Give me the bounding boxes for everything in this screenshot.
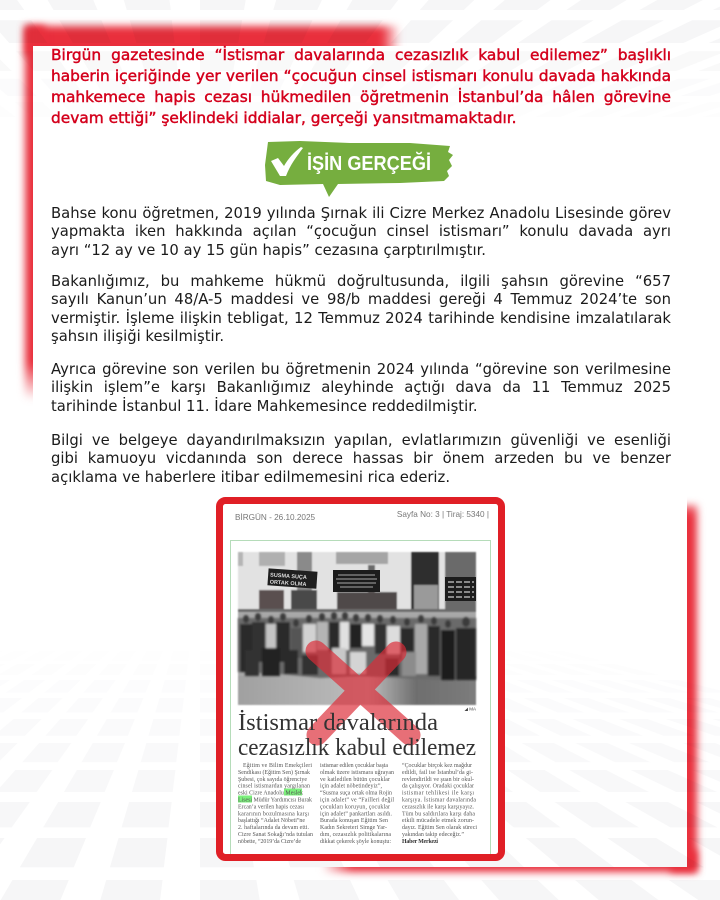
paragraph 2: Bakanlığımız, bu mahkeme hükmü doğrultusunda, ilgili şahsın görevine “657 (51, 273, 671, 290)
newspaper columns: başlattığı “Adalet Nöbeti”ne (238, 817, 305, 824)
paragraph 4: Bilgi ve belgeye dayandırılmaksızın yapılan, evlatlarımızın güvenliği ve esenliği (51, 432, 671, 449)
newspaper columns: Şubesi, çok sayıda öğrenciye (238, 776, 307, 783)
clipping page info: Sayfa No: 3 | Tiraj: 5340 | (397, 510, 489, 519)
newspaper columns: istismar edilen çocuklar başta (320, 763, 388, 769)
newspaper columns: revlendirildi ve şuan bir okul- (402, 777, 474, 783)
newspaper columns: etkili mücadele etmek zorun- (402, 818, 474, 824)
badge: işin gerçeği (265, 141, 453, 197)
newspaper columns: ve katledilen bütün çocuklar (320, 777, 390, 783)
heading text: mahkemece hapis cezası hükmedilen öğretmenin İstanbul’da hâlen görevine (51, 88, 671, 106)
paragraph 4: açıklama ve haberlere itibar edilmemesini rica ederiz. (51, 469, 450, 486)
paragraph 3: Ayrıca görevine son verilen bu öğretmenin 2024 yılında “görevine son verilmesine (51, 361, 671, 378)
paragraph 1: ayrı “12 ay ve 10 ay 15 gün hapis” cezasına çarptırılmıştır. (51, 242, 486, 259)
newspaper photo (238, 552, 476, 705)
newspaper columns: olmak üzere istismara uğrayan (320, 769, 394, 776)
newspaper columns: Tüm bu saldırılara karşı daha (402, 811, 475, 817)
paragraph 2: sayılı Kanun’un 48/A-5 maddesi ve 98/b maddesi gereği 4 Temmuz 2024’te son (51, 291, 671, 308)
paragraph 3: ilişkin işlem”e karşı Bakanlığımız aleyhinde açtığı dava da 11 Temmuz 2025 (51, 379, 671, 396)
newspaper columns: Ercan’a verilen hapis cezası (238, 804, 304, 810)
newspaper columns: dayız. Eğitim Sen olarak süreci (402, 824, 477, 831)
newspaper columns: için adalet nöbetindeyiz”, (320, 784, 383, 790)
green outline (230, 540, 490, 854)
red cross (316, 651, 410, 735)
newspaper columns: cezasızlık ile karşı karşıyayız. (402, 804, 475, 810)
paragraph 1: yapmakta iken hakkında açılan “çocuğun cinsel istismarı” konulu davada ayrı (51, 223, 671, 240)
paragraph 4: gibi kamuoyu vicdanında son derece hassas bir önem arzeden bu ve benzer (51, 450, 671, 467)
clipping frame (220, 500, 502, 858)
newspaper columns: Eğitim ve Bilim Emekçileri (243, 762, 312, 769)
newspaper headline (238, 709, 476, 761)
newspaper headline: İstismar davalarında (238, 709, 438, 736)
photo banners (267, 568, 476, 601)
newspaper columns: 2. haftalarında da devam etti. (238, 824, 310, 831)
photo banners: SUSMA SUÇA (270, 572, 307, 581)
newspaper columns: edildi, fail ise İstanbul’da gi- (402, 769, 473, 776)
paragraph 2: şahsın ilişiği kesilmiştir. (51, 328, 224, 345)
check mark (271, 147, 303, 176)
heading text (51, 46, 671, 127)
heading text: haberin içeriğinde yer verilen “çocuğun cinsel istismarı konulu davada hakkında (51, 67, 671, 85)
heading text: devam ettiği” şeklindeki iddialar, gerçeği yansıtmamaktadır. (51, 109, 517, 127)
newspaper columns: için adalet” pankartları asıldı. (320, 811, 393, 817)
newspaper columns: karşıya. İstismar davalarında (402, 796, 476, 804)
newspaper clipping (216, 497, 505, 861)
newspaper columns: “Çocuklar birçok kez mağdur (402, 762, 472, 769)
paragraph 3 (51, 361, 671, 415)
paragraph 4 (51, 432, 671, 486)
newspaper columns: Haber Merkezi (402, 839, 438, 845)
photo crowd (238, 612, 476, 680)
photo credit: ◢ MA (465, 706, 476, 712)
heading text: Birgün gazetesinde “İstismar davalarında cezasızlık kabul edilemez” başlıklı (51, 46, 671, 64)
paragraph 2: vermiştir. İşleme ilişkin tebligat, 12 Temmuz 2024 tarihinde kendisine imzalatılarak (51, 310, 671, 327)
badge brush shape (265, 141, 453, 197)
newspaper columns: nöbette, “2019’da Cizre’de (238, 838, 301, 845)
newspaper columns: Cizre Sanat Sokağı’nda tutulan (238, 831, 313, 838)
newspaper columns: çocukları koruyun, çocuklar (320, 804, 390, 810)
newspaper columns: kararının bozulmasına karşı (238, 811, 309, 817)
badge label: İŞİN GERÇEĞİ (307, 151, 431, 175)
newspaper columns: Kadın Sekreteri Simge Yar- (320, 825, 387, 831)
newspaper columns: yakından takip edeceğiz.” (402, 831, 464, 838)
paragraph 1 (51, 205, 671, 259)
newspaper headline: cezasızlık kabul edilemez (238, 734, 476, 761)
newspaper columns: için adalet” ve “Failleri değil (320, 796, 394, 804)
newspaper columns: dikkat çekerek şöyle konuştu: (320, 839, 391, 845)
newspaper columns: Burada konuşan Eğitim Sen (320, 817, 388, 824)
photo banners: ORTAK OLMA (269, 579, 307, 588)
paragraph 2 (51, 273, 671, 345)
newspaper columns: eski Cizre Anadolu Meslek (238, 791, 303, 797)
newspaper columns: istismar tehlikesi ile karşı (402, 791, 474, 797)
highlight (238, 788, 302, 802)
newspaper columns: Lisesi Müdür Yardımcısı Burak (238, 798, 312, 804)
newspaper columns (238, 762, 477, 845)
paragraph 3: tarihinde İstanbul 11. İdare Mahkemesince reddedilmiştir. (51, 398, 478, 415)
newspaper columns: cinsel istismardan yargılanan (238, 784, 310, 790)
newspaper columns: “Susma suça ortak olma Rojin (320, 790, 392, 797)
clipping date: BİRGÜN - 26.10.2025 (235, 512, 316, 522)
newspaper columns: dım, cezasızlık politikalarına (320, 832, 391, 838)
paragraph 1: Bahse konu öğretmen, 2019 yılında Şırnak ili Cizre Merkez Anadolu Lisesinde görev (51, 205, 671, 222)
newspaper columns: da çalışıyor. Oradaki çocuklar (402, 784, 474, 790)
newspaper columns: Sendikası (Eğitim Sen) Şırnak (238, 769, 310, 776)
